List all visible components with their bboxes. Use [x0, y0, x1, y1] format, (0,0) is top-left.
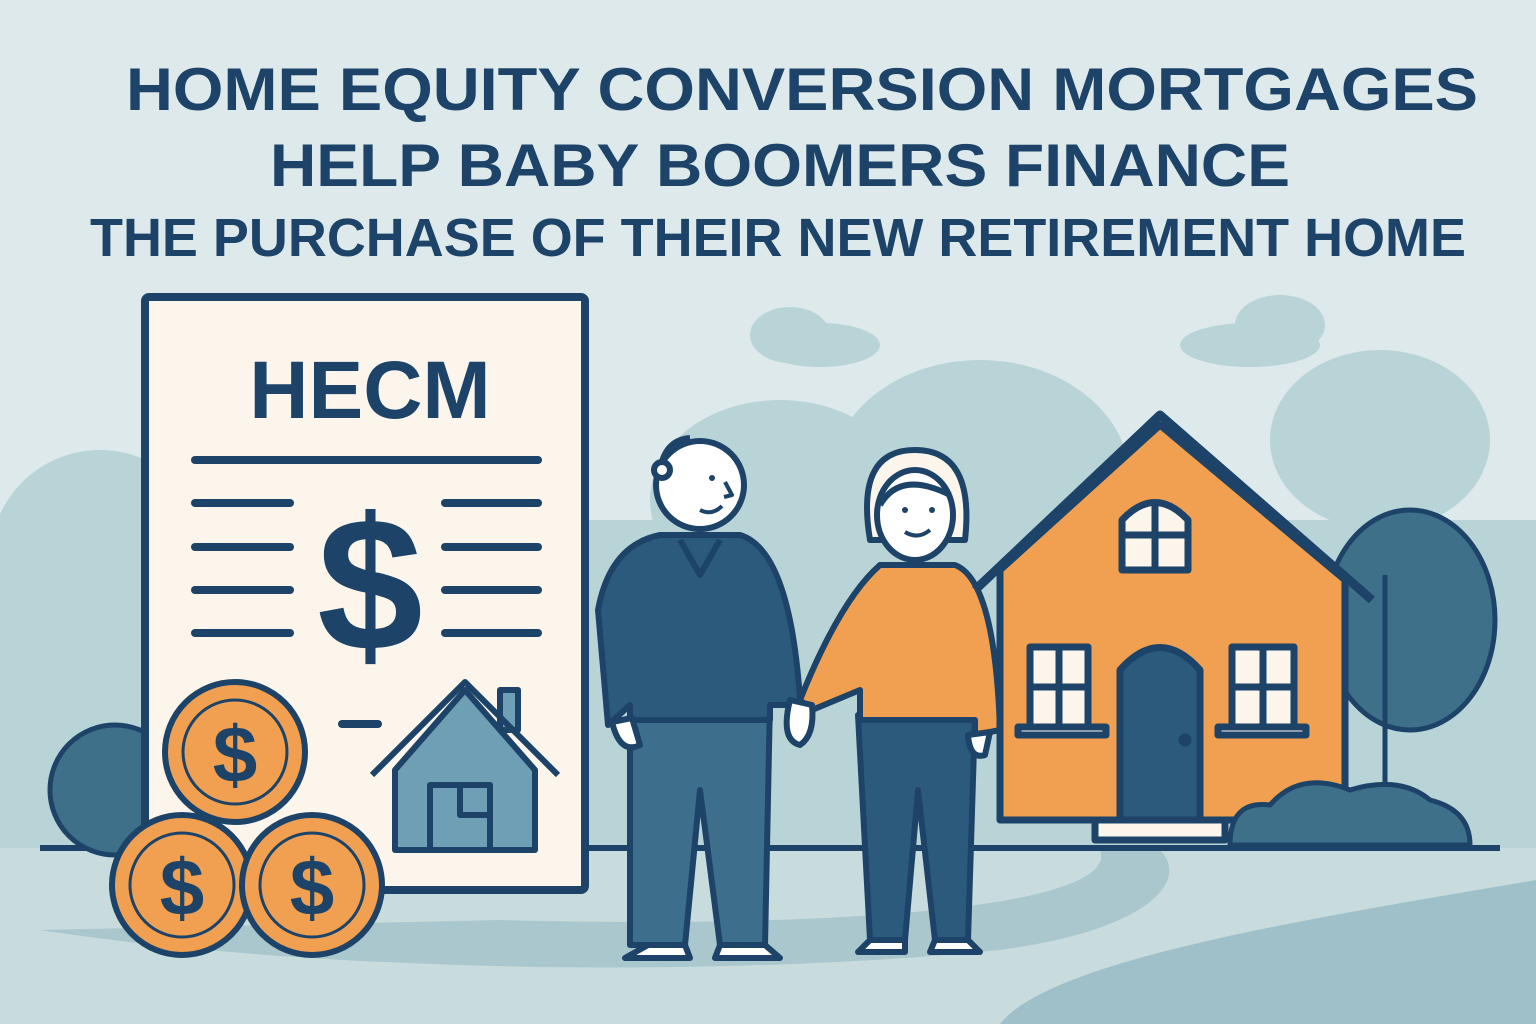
document: HECM	[145, 297, 585, 890]
woman	[787, 450, 1000, 952]
background hills and clouds	[0, 295, 1536, 850]
title	[90, 56, 1478, 268]
title: HELP BABY BOOMERS FINANCE	[270, 132, 1290, 199]
infographic scene: $	[213, 710, 257, 799]
document: HECM: HECM	[249, 345, 491, 436]
left bush	[50, 725, 180, 855]
infographic scene: $	[160, 843, 204, 932]
title: HOME EQUITY CONVERSION MORTGAGES	[126, 56, 1478, 123]
right tree	[1325, 510, 1495, 800]
infographic scene: $	[290, 843, 334, 932]
right bush	[1230, 783, 1470, 845]
title: THE PURCHASE OF THEIR NEW RETIREMENT HOME	[90, 208, 1466, 268]
small house	[372, 682, 558, 850]
house	[975, 415, 1372, 840]
ground	[0, 848, 1536, 1024]
dollar sign: $	[317, 479, 423, 691]
man	[598, 438, 800, 958]
coins	[112, 682, 382, 955]
